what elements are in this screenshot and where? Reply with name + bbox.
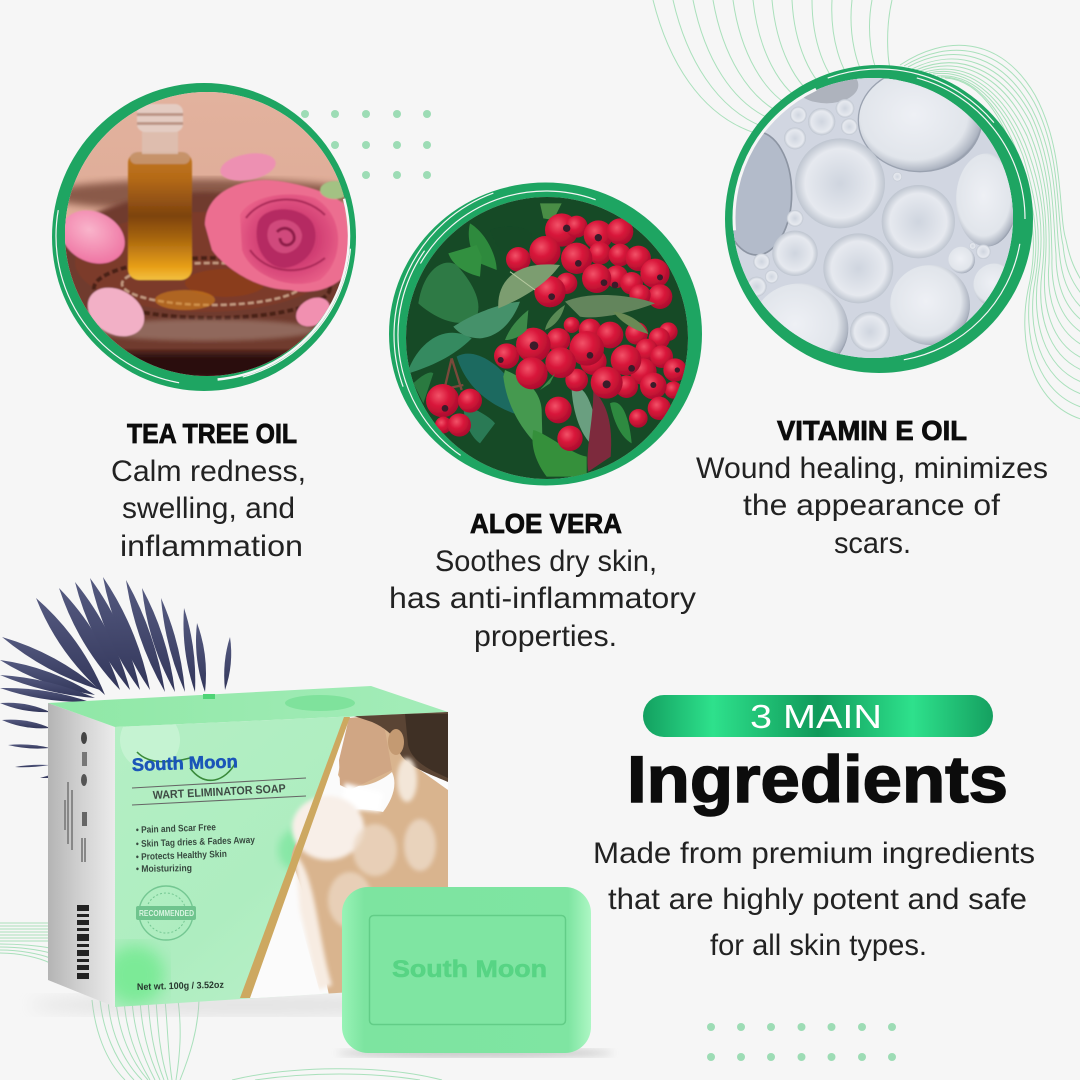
text block: tea tree oil: Calm redness,: [111, 455, 306, 488]
red berries and leaves photo: [406, 197, 688, 479]
text block: aloe vera: [389, 508, 696, 653]
light leaves over berries: [498, 264, 560, 308]
white panel and model: [245, 712, 448, 998]
product box: [48, 686, 450, 1010]
decorative wave lines: bottom left: [0, 923, 442, 1080]
box feature bullets: [136, 822, 256, 875]
box side panel: [48, 703, 115, 1007]
box logo text: South Moon: [131, 751, 238, 775]
box logo text: WART ELIMINATOR SOAP: [153, 783, 286, 802]
soap shadow: [337, 1049, 613, 1057]
description text: [593, 837, 1035, 962]
net weight: Net wt. 100g / 3.52oz: [137, 980, 224, 993]
box logo text: [131, 751, 306, 805]
pill badge: 3 main: [643, 695, 993, 737]
dot grid: bottom right: [707, 1023, 896, 1061]
decorative wave lines: top right fan: [653, 0, 892, 133]
text block: tea tree oil: swelling, and: [122, 492, 295, 525]
dot grid: top: [301, 110, 431, 179]
recommended stamp: RECOMMENDED: [139, 909, 194, 918]
text block: vitamin e oil: Wound healing, minimizes: [696, 452, 1048, 485]
recommended stamp: [136, 886, 196, 940]
heading: ingredients: Ingredients: [627, 742, 1008, 816]
text block: tea tree oil: [111, 418, 306, 563]
brush strokes: [340, 130, 750, 540]
product shadow: [30, 995, 470, 1015]
box front panel: [105, 710, 450, 1010]
barcode: [77, 905, 89, 979]
text block: aloe vera: properties.: [474, 620, 617, 653]
brush ring: [52, 83, 356, 391]
text block: vitamin e oil: VITAMIN E OIL: [777, 415, 967, 446]
box feature bullets: • Skin Tag dries & Fades Away: [136, 835, 256, 850]
text block: aloe vera: Soothes dry skin,: [435, 545, 657, 578]
bottle: [128, 152, 192, 280]
soap bar: South Moon: [392, 956, 547, 983]
brush strokes: [29, 60, 381, 412]
text block: tea tree oil: TEA TREE OIL: [127, 418, 297, 449]
ingredient photo: aloe vera: [389, 182, 702, 486]
oil and rose photo: [65, 92, 348, 376]
description text: Made from premium ingredients: [593, 837, 1035, 870]
brush strokes: [687, 27, 1071, 411]
pill badge: 3 main: 3 MAIN: [750, 698, 882, 735]
oil bubbles photo: [734, 78, 1013, 358]
text block: tea tree oil: inflammation: [120, 530, 303, 563]
box feature bullets: • Pain and Scar Free: [136, 822, 216, 836]
berries: [426, 213, 687, 451]
text block: vitamin e oil: scars.: [834, 527, 911, 560]
text block: vitamin e oil: the appearance of: [743, 489, 1001, 522]
petals: [220, 153, 276, 182]
ingredient photo: vitamin e oil: [725, 65, 1033, 373]
text block: aloe vera: has anti-inflammatory: [389, 582, 696, 615]
description text: for all skin types.: [710, 929, 927, 962]
gold stripe: [240, 717, 350, 998]
brush ring: [725, 65, 1033, 373]
brush ring: [389, 183, 702, 485]
soap bar: [342, 887, 591, 1053]
icon: palm leaf: [0, 577, 231, 778]
decorative wave lines: right side ribbon: [900, 45, 1080, 420]
text block: vitamin e oil: [696, 415, 1048, 560]
box feature bullets: • Moisturizing: [136, 863, 192, 875]
rose: [205, 180, 352, 292]
text block: aloe vera: ALOE VERA: [470, 508, 622, 539]
box top panel: [48, 686, 448, 727]
ingredient photo: tea tree oil: [52, 83, 356, 391]
box feature bullets: • Protects Healthy Skin: [136, 849, 227, 863]
description text: that are highly potent and safe: [608, 883, 1027, 916]
